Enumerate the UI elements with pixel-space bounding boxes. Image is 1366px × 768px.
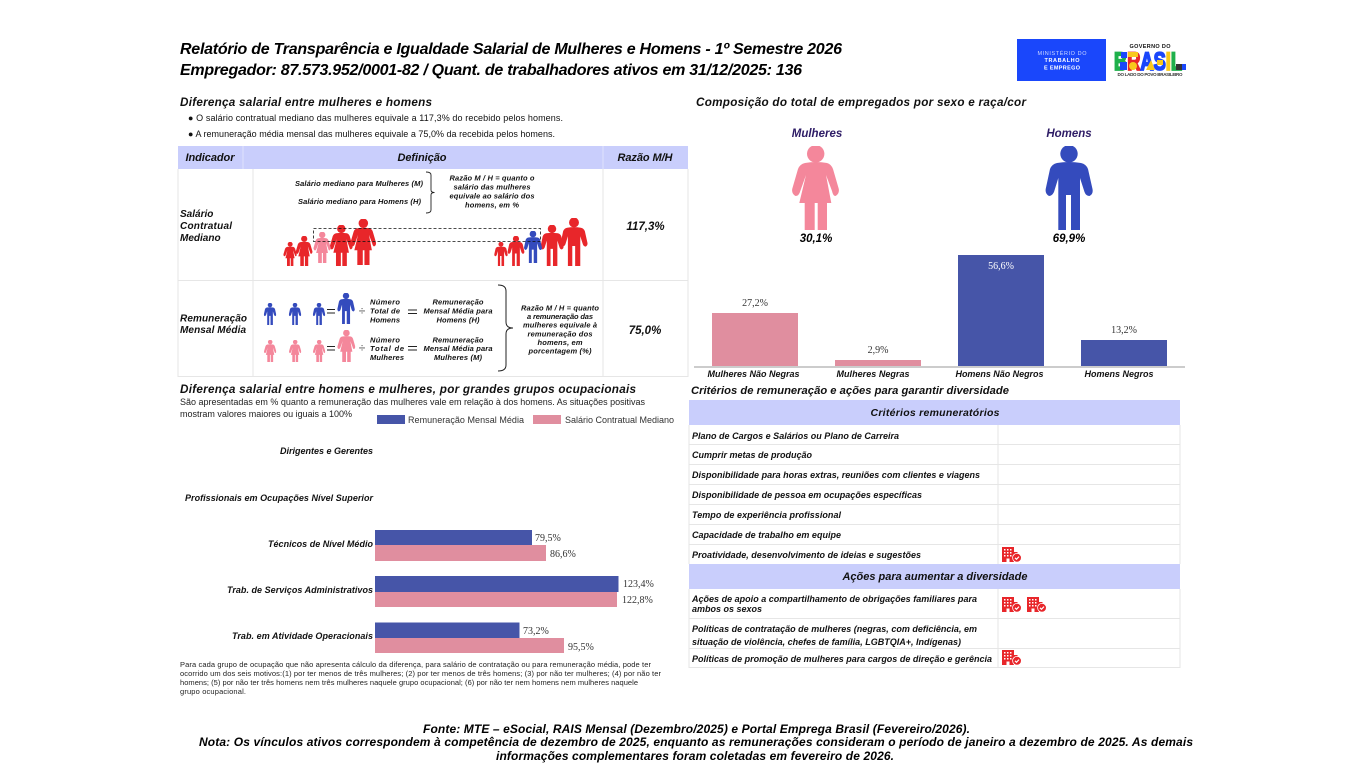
brace and explanation: remuneração dos — [528, 330, 592, 338]
text block: explicação: mostram valores maiores ou iguais a 100% — [180, 409, 352, 419]
table header — [178, 146, 688, 169]
brace and explanation: mulheres equivale à — [523, 320, 597, 330]
panel: mulheres — [792, 128, 842, 245]
panel: mulheres: 30,1% — [800, 233, 832, 245]
text block: explicação: São apresentadas em % quanto a remuneração das mulheres vale em relação à dos homens. As situações positivas — [180, 397, 646, 407]
bar chart: sexo e raça/cor: Homens Não Negros — [956, 369, 1044, 379]
legend: Remuneração Mensal Média — [408, 415, 524, 425]
text block: explicação — [180, 397, 646, 419]
formula text: homens: Remuneração — [432, 298, 484, 306]
bar chart: sexo e raça/cor: Homens Negros — [1084, 369, 1154, 379]
bar chart: grupos ocupacionais: Técnicos de Nível Médio — [268, 539, 374, 549]
panel: critérios remuneratórios — [689, 400, 1180, 564]
title: Relatório de Transparência e Igualdade Salarial de Mulheres e Homens - 1º Semestre 2026 — [180, 41, 842, 58]
panel: tabela de indicadores — [178, 146, 688, 376]
table header: Definição — [398, 152, 447, 164]
title: Empregador: 87.573.952/0001-82 / Quant. de trabalhadores ativos em 31/12/2025: 136 — [180, 62, 802, 79]
panel: critérios remuneratórios: Cumprir metas de produção — [692, 450, 812, 460]
definition text: salário mediano: Razão M / H = quanto o — [450, 174, 535, 182]
indicator: remuneração mensal média: Remuneração — [180, 314, 247, 324]
text block: bullets — [188, 113, 563, 139]
bar chart: grupos ocupacionais: Trab. de Serviços Administrativos — [227, 585, 373, 595]
logo: Ministério do Trabalho e Emprego: E EMPREGO — [1044, 66, 1081, 72]
definition text: salário mediano: homens, em % — [465, 200, 519, 210]
formula text: mulheres — [370, 336, 492, 362]
bar chart: sexo e raça/cor: 2,9% — [868, 345, 888, 356]
brace and explanation — [498, 285, 599, 371]
panel: ações para diversidade: Políticas de contratação de mulheres (negras, com deficiência, em — [692, 624, 977, 634]
footer: fonte e nota: informações complementares foram coletadas em fevereiro de 2026. — [496, 749, 894, 763]
bar chart: sexo e raça/cor: 56,6% — [988, 261, 1014, 272]
icon group: median figures — [283, 218, 588, 266]
logo: Ministério do Trabalho e Emprego: MINISTÉRIO DO — [1038, 50, 1087, 57]
bar chart: grupos ocupacionais: 79,5% — [535, 533, 561, 544]
bar chart: grupos ocupacionais: Dirigentes e Gerentes — [280, 446, 373, 456]
formula text: mulheres: Mensal Média para — [424, 344, 492, 353]
table header: Razão M/H — [618, 152, 674, 164]
definition text: salário mediano: Salário mediano para Homens (H) — [298, 197, 422, 206]
panel: homens: Homens — [1046, 128, 1092, 140]
table header: Indicador — [186, 152, 235, 164]
bar chart: sexo e raça/cor: Mulheres Não Negras — [708, 369, 800, 379]
formula text: homens: Homens (H) — [436, 316, 480, 324]
brace and explanation: Razão M / H = quanto — [521, 304, 599, 312]
formula text: homens: Número — [370, 298, 400, 306]
panel: ações para diversidade: situação de violência, chefes de família, LGBTQIA+, Indígenas) — [692, 637, 961, 647]
panel: critérios remuneratórios: Proatividade, desenvolvimento de ideias e sugestões — [692, 550, 921, 560]
value: 117,3%: 117,3% — [626, 221, 665, 233]
logo: Governo do Brasil: DO LADO DO POVO BRASILEIRO — [1118, 72, 1183, 77]
bar chart: grupos ocupacionais: 123,4% — [623, 579, 654, 590]
panel: mulheres: Mulheres — [792, 128, 842, 140]
legend — [377, 415, 674, 425]
heading: diferença salarial: Diferença salarial entre mulheres e homens — [180, 96, 432, 109]
text block: nota dos grupos: ocorrido um dos seis motivos:(1) por ter menos de três mulheres; (2) por ter menos de três homens; (3) por não ter mulheres; (4) por não ter — [180, 669, 662, 678]
panel: critérios remuneratórios: Capacidade de trabalho em equipe — [692, 530, 841, 540]
definition text: salário mediano — [295, 172, 535, 213]
definition text: salário mediano: Salário mediano para Mulheres (M) — [295, 179, 424, 188]
text block: nota dos grupos — [180, 660, 662, 696]
heading: composição: Composição do total de empregados por sexo e raça/cor — [696, 96, 1027, 109]
indicator: salário contratual mediano — [180, 209, 232, 244]
footer: fonte e nota — [199, 722, 1193, 763]
logo: Ministério do Trabalho e Emprego: TRABALHO — [1044, 58, 1080, 64]
formula text: homens: Mensal Média para — [424, 306, 492, 316]
text block: nota dos grupos: Para cada grupo de ocupação que não apresenta cálculo da diferença, para salário de contratação ou para remuneração média, pode ter — [180, 660, 652, 669]
indicator: remuneração mensal média: Mensal Média — [180, 325, 246, 336]
formula symbols — [327, 304, 417, 355]
bar chart: grupos ocupacionais — [185, 446, 654, 653]
text block: bullets: ● A remuneração média mensal das mulheres equivale a 75,0% da recebida pelos homens. — [188, 129, 555, 139]
indicator: salário contratual mediano: Mediano — [180, 233, 221, 244]
icon group: women formula — [264, 330, 355, 362]
logo: Ministério do Trabalho e Emprego — [1017, 39, 1106, 81]
indicator: salário contratual mediano: Contratual — [180, 221, 232, 232]
formula text: mulheres: Mulheres (M) — [434, 353, 482, 362]
bar chart: grupos ocupacionais: Trab. em Atividade Operacionais — [232, 631, 373, 641]
icon: empresas com selo — [1002, 597, 1046, 612]
bar chart: grupos ocupacionais: 86,6% — [550, 549, 576, 560]
panel: critérios remuneratórios: Tempo de experiência profissional — [692, 510, 841, 520]
indicator: remuneração mensal média — [180, 314, 247, 336]
panel: ações para diversidade — [689, 564, 1180, 668]
formula text: homens — [370, 298, 492, 324]
icon group: men formula — [264, 293, 355, 325]
bar chart: grupos ocupacionais: 122,8% — [622, 595, 653, 606]
bar chart: sexo e raça/cor — [694, 255, 1185, 379]
bar chart: grupos ocupacionais: 73,2% — [523, 626, 549, 637]
panel: ações para diversidade: Ações de apoio a compartilhamento de obrigações familiares para — [691, 594, 977, 604]
logo: Governo do Brasil: BRASIL — [1114, 48, 1182, 76]
definition text: salário mediano: equivale ao salário dos — [450, 192, 534, 200]
bar chart: grupos ocupacionais: 95,5% — [568, 642, 594, 653]
logo: Governo do Brasil: GOVERNO DO — [1130, 44, 1171, 50]
panel: homens: 69,9% — [1053, 233, 1085, 245]
panel: ações para diversidade: Ações para aumentar a diversidade — [842, 571, 1028, 583]
text block: nota dos grupos: homens; (5) por não ter três homens nem três mulheres naquele grupo ocupacional; (6) por não ter nem homens nem mulheres naquele — [180, 678, 638, 687]
panel: homens — [1046, 128, 1093, 245]
panel: critérios remuneratórios: Disponibilidade de pessoa em ocupações específicas — [692, 490, 922, 500]
title — [180, 41, 842, 79]
bar chart: sexo e raça/cor: Mulheres Negras — [836, 369, 910, 379]
bar chart: sexo e raça/cor: 27,2% — [742, 298, 768, 309]
icon: empresa com selo — [1002, 547, 1021, 562]
bar chart: sexo e raça/cor: 13,2% — [1111, 325, 1137, 336]
formula text: mulheres: Mulheres — [370, 353, 404, 362]
heading: critérios: Critérios de remuneração e ações para garantir diversidade — [691, 385, 1009, 397]
definition text: salário mediano: salário das mulheres — [454, 182, 530, 192]
panel: critérios remuneratórios: Plano de Cargos e Salários ou Plano de Carreira — [692, 431, 899, 441]
brace and explanation: porcentagem (%) — [528, 346, 592, 356]
indicator: salário contratual mediano: Salário — [180, 209, 213, 220]
formula text: homens: Total de — [370, 306, 400, 316]
icon: empresa com selo — [1002, 650, 1021, 665]
legend: Salário Contratual Mediano — [565, 415, 674, 425]
brace and explanation: a remuneração das — [527, 312, 593, 321]
formula text: mulheres: Número — [370, 336, 400, 344]
formula symbols: ÷ — [359, 341, 366, 355]
bar chart: grupos ocupacionais: Profissionais em Ocupações Nível Superior — [185, 493, 373, 503]
panel: ações para diversidade: Políticas de promoção de mulheres para cargos de direção e gerência — [692, 654, 992, 664]
formula text: mulheres: Remuneração — [432, 336, 484, 344]
text block: bullets: ● O salário contratual mediano das mulheres equivale a 117,3% do recebido pelos homens. — [188, 113, 563, 123]
formula text: mulheres: Total de — [370, 344, 404, 353]
panel: critérios remuneratórios: Critérios remuneratórios — [870, 407, 1000, 419]
brace and explanation: homens, em — [538, 338, 583, 347]
panel: critérios remuneratórios: Disponibilidade para horas extras, reuniões com clientes e viagens — [692, 470, 980, 480]
value: 75,0%: 75,0% — [629, 325, 661, 337]
formula symbols: ÷ — [359, 304, 366, 318]
formula text: homens: Homens — [370, 316, 400, 324]
text block: nota dos grupos: grupo ocupacional. — [180, 687, 246, 696]
footer: fonte e nota: Nota: Os vínculos ativos correspondem à competência de dezembro de 2025, enquanto as remunerações consideram o período de janeiro a dezembro de 2025. As demais — [199, 735, 1193, 749]
heading: grupos ocupacionais: Diferença salarial entre homens e mulheres, por grandes grupos ocupacionais — [180, 383, 636, 396]
panel: ações para diversidade: ambos os sexos — [692, 604, 762, 614]
footer: fonte e nota: Fonte: MTE – eSocial, RAIS Mensal (Dezembro/2025) e Portal Emprega Brasil (Fevereiro/2026). — [423, 722, 970, 736]
